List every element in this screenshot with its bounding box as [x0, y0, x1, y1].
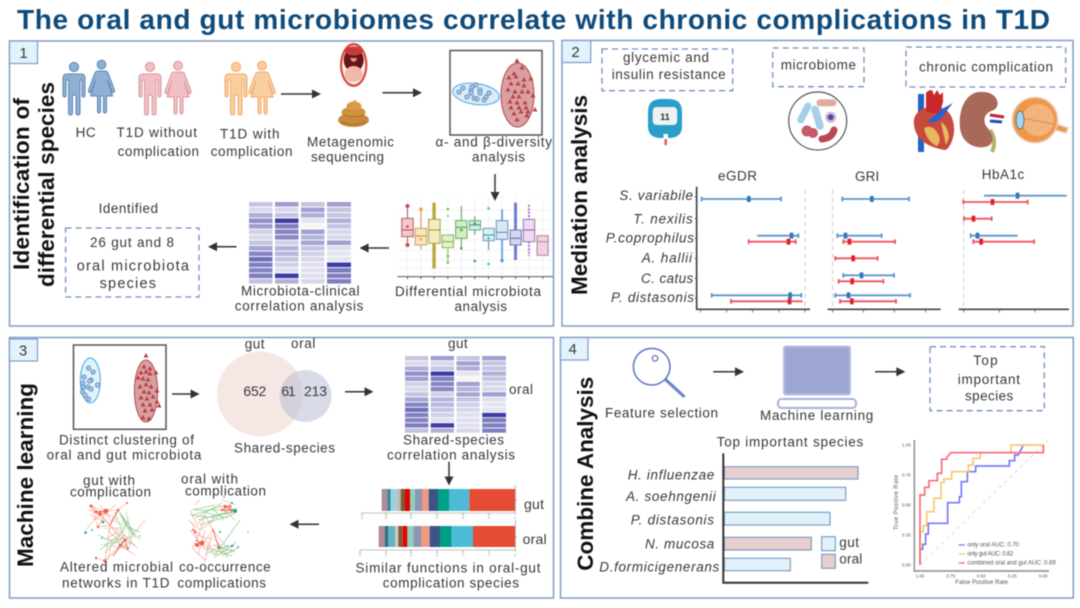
panel number 4	[560, 338, 588, 360]
arrow left	[290, 520, 319, 529]
label T1D without complication: complication	[118, 144, 199, 159]
stacked bar: oral: 0	[513, 554, 517, 556]
label T1D with complication: complication	[211, 144, 292, 159]
label shared-species: Shared-species	[234, 441, 335, 456]
arrow left	[208, 242, 236, 251]
forest plot headings: HbA1c	[982, 167, 1025, 182]
callout: identified species: 26 gut and 8	[90, 235, 174, 250]
heatmap: shared-species correlation: oral	[509, 382, 533, 397]
ROC curve chart: True Positive Rate	[894, 474, 900, 530]
bar chart: top important species: oral	[839, 551, 862, 566]
icon: glucose meter	[648, 99, 682, 145]
label oral network: oral with	[181, 472, 238, 487]
icon: kidney	[960, 92, 1004, 152]
icon: laptop	[778, 346, 856, 408]
network: oral with complication	[188, 496, 249, 562]
label T1D without complication: T1D without	[116, 125, 197, 140]
label similar functions: complication species	[383, 576, 519, 591]
label gut network: gut with	[83, 473, 135, 488]
stacked bar: gut: 0.5	[384, 514, 388, 519]
label network caption	[60, 559, 271, 591]
panel number 2	[562, 40, 591, 62]
icon: healthy controls	[63, 60, 115, 115]
ROC curve chart: 0.00	[902, 562, 911, 568]
callout chronic complication: chronic complication	[919, 60, 1053, 75]
callout chronic complication	[906, 47, 1066, 87]
callout microbiome: microbiome	[781, 57, 856, 72]
bar chart: top important species	[599, 435, 868, 583]
label similar functions	[356, 561, 541, 591]
label machine learning: Machine learning	[760, 408, 873, 423]
callout glycemic: insulin resistance	[612, 67, 726, 82]
label feature selection: Feature selection	[605, 406, 718, 421]
ROC curve chart: 0.50	[977, 573, 986, 578]
label network caption: Altered microbial	[60, 559, 173, 574]
forest plot species labels: S. variabile	[619, 188, 693, 203]
callout microbiome	[773, 48, 864, 87]
vertical heading: differential species	[34, 82, 59, 287]
bar chart: top important species: D.formicigenerans	[599, 560, 720, 575]
forest plot species labels: P.coprophilus	[606, 230, 694, 245]
forest plots: eGDR GRI HbA1c	[695, 187, 1069, 312]
vertical heading: Mediation analysis	[567, 95, 592, 295]
label differential analysis: analysis	[454, 299, 507, 314]
arrow	[281, 90, 321, 98]
vertical heading: Combine Analysis	[573, 377, 598, 571]
callout: identified species: species	[100, 276, 156, 292]
ROC curve chart: 0.50	[902, 502, 911, 508]
label differential analysis	[395, 284, 541, 314]
icon: heart	[914, 90, 954, 152]
box plot	[397, 197, 553, 279]
stacked bar: oral: 0.1	[487, 551, 491, 556]
label microbiota-clinical correlation	[235, 284, 364, 314]
label oral network: complication	[185, 484, 266, 499]
label microbiota-clinical correlation: Microbiota-clinical	[241, 284, 360, 299]
label microbiota-clinical correlation: correlation analysis	[235, 299, 364, 314]
stacked bar: oral: 0.4	[409, 551, 413, 556]
arrow	[382, 88, 422, 97]
venn diagram: gut	[245, 336, 265, 351]
arrow	[172, 390, 200, 398]
arrow down	[490, 174, 500, 201]
callout glycemic: glycemic and	[623, 50, 709, 65]
stacked bar: oral: 0.3	[435, 551, 439, 556]
icon: stool	[338, 100, 369, 127]
panel number 4: 4	[569, 341, 577, 358]
arrow	[345, 387, 374, 396]
callout: top important species: Top	[973, 353, 998, 368]
icon: glucose meter: 11	[660, 112, 670, 122]
label diversity analysis: α- and β-diversity	[436, 135, 552, 150]
label network caption: co-occurrence	[179, 559, 271, 574]
bar chart: top important species: H. influenzae	[628, 467, 714, 482]
venn diagram: oral	[291, 336, 315, 351]
icon: microbes	[789, 92, 847, 150]
panel: identification of differential species	[9, 41, 554, 326]
bar chart: top important species: N. mucosa	[645, 537, 715, 552]
label metagenomic sequencing: sequencing	[311, 150, 384, 165]
arrow down	[444, 462, 454, 486]
forest plot species labels	[606, 188, 694, 305]
stacked bar: gut: 0.4	[409, 514, 413, 519]
callout: top important species	[930, 347, 1044, 411]
label T1D without complication	[116, 125, 199, 159]
icon: eye	[1012, 98, 1068, 142]
heatmap: shared-species correlation	[405, 336, 533, 433]
stacked bar: oral	[358, 520, 547, 556]
stacked bar: gut: 0.6	[360, 514, 364, 519]
label T1D with complication	[211, 127, 292, 159]
vertical heading: Machine learning	[13, 383, 38, 567]
vertical heading	[9, 82, 59, 287]
label shared-species correlation: correlation analysis	[387, 447, 515, 462]
ROC curve chart: 0.25	[1008, 573, 1017, 578]
scatter: oral and gut clustering	[74, 345, 166, 429]
ROC curve chart: only oral AUC: 0.70	[967, 543, 1020, 549]
forest plot headings: GRI	[855, 169, 879, 184]
callout glycemic	[602, 49, 733, 91]
label distinct clustering: oral and gut microbiota	[47, 447, 202, 462]
arrow	[875, 367, 905, 376]
venn diagram: 652	[243, 383, 267, 399]
vertical heading: Identification of	[9, 98, 34, 270]
label diversity analysis	[436, 135, 552, 165]
venn diagram	[217, 336, 332, 436]
network: gut with complication	[84, 502, 145, 563]
stacked bar: oral: 0.5	[384, 551, 388, 556]
panel number 3	[10, 339, 38, 361]
icon: mouth	[340, 43, 367, 87]
arrow left	[360, 244, 389, 252]
callout: identified species: oral microbiota	[77, 259, 190, 275]
ROC curve chart: 1.00	[916, 573, 925, 578]
label network caption: networks in T1D	[62, 576, 170, 591]
label shared-species correlation	[387, 432, 515, 462]
heatmap: shared-species correlation: gut	[448, 336, 468, 351]
ROC curve chart: 0.25	[902, 532, 911, 538]
ROC curve chart	[894, 440, 1056, 586]
forest plot species labels: C. catus	[641, 271, 694, 286]
ROC curve chart: 1.00	[902, 442, 911, 448]
bar chart: top important species: gut	[839, 535, 859, 550]
label similar functions: Similar functions in oral-gut	[356, 561, 541, 576]
bar chart: top important species: P. distasonis	[631, 512, 714, 527]
icon: magnifier	[633, 348, 684, 396]
callout: identified species	[66, 228, 199, 297]
ROC curve chart: only gut AUC: 0.82	[967, 552, 1014, 558]
stacked bar: oral: oral	[523, 531, 547, 547]
title: The oral and gut microbiomes correlate with chronic complications in T1D	[17, 4, 1050, 35]
callout: top important species: species	[965, 389, 1014, 404]
forest plot headings	[718, 167, 1025, 184]
forest plot species labels: P. distasonis	[611, 290, 694, 305]
label identified: Identified	[99, 201, 158, 216]
label distinct clustering	[47, 432, 202, 462]
bar chart: top important species: A. soehngenii	[625, 489, 717, 504]
label network caption: complications	[177, 576, 266, 591]
label differential analysis: Differential microbiota	[395, 284, 541, 299]
panel number 3: 3	[19, 342, 27, 360]
stacked bar: gut: 0.1	[487, 514, 491, 519]
ROC curve chart: 0.00	[1039, 573, 1048, 578]
bar chart: top important species: Top important species	[717, 435, 864, 450]
arrow	[713, 367, 744, 376]
ROC curve chart: 0.75	[946, 573, 956, 578]
venn diagram: 213	[304, 383, 327, 399]
panel: mediation analysis	[562, 40, 1073, 326]
stacked bar: gut: gut	[524, 496, 544, 512]
stacked bar: gut	[360, 485, 544, 519]
ROC curve chart: False Positive Rate	[955, 580, 1009, 586]
venn diagram: 61	[281, 383, 296, 399]
panel: machine learning	[10, 336, 554, 598]
stacked bar: gut: 0.3	[435, 514, 439, 519]
label metagenomic sequencing: Metagenomic	[307, 135, 394, 150]
icon: T1D with complication	[225, 61, 275, 115]
stacked bar: gut: 0	[513, 517, 517, 519]
panel number 1: 1	[19, 45, 28, 62]
label oral network	[181, 472, 266, 499]
panel: combine analysis	[560, 338, 1073, 598]
label diversity analysis: analysis	[472, 150, 525, 165]
label T1D with complication: T1D with	[220, 127, 280, 142]
heatmap: microbiota-clinical	[249, 202, 351, 284]
icon: T1D without complication	[139, 61, 191, 115]
forest plot species labels: A. hallii	[641, 251, 693, 266]
label shared-species correlation: Shared-species	[403, 432, 504, 447]
label gut network: complication	[70, 485, 151, 500]
scatter: diversity ordination	[450, 50, 542, 135]
label gut network	[70, 473, 151, 500]
ROC curve chart: combined oral and gut AUC: 0.89	[967, 561, 1056, 567]
callout: top important species: important	[958, 372, 1020, 387]
stacked bar: gut: 0.2	[461, 514, 465, 519]
label HC: HC	[76, 125, 96, 140]
label metagenomic sequencing	[307, 135, 394, 165]
forest plot headings: eGDR	[718, 169, 757, 184]
forest plot species labels: T. nexilis	[633, 211, 693, 226]
stacked bar: oral: 0.6	[358, 551, 362, 556]
stacked bar: oral: 0.2	[461, 551, 465, 556]
ROC curve chart: 0.75	[902, 472, 911, 478]
panel number 2: 2	[571, 44, 580, 61]
panel number 1	[10, 41, 38, 64]
label distinct clustering: Distinct clustering of	[59, 432, 194, 447]
